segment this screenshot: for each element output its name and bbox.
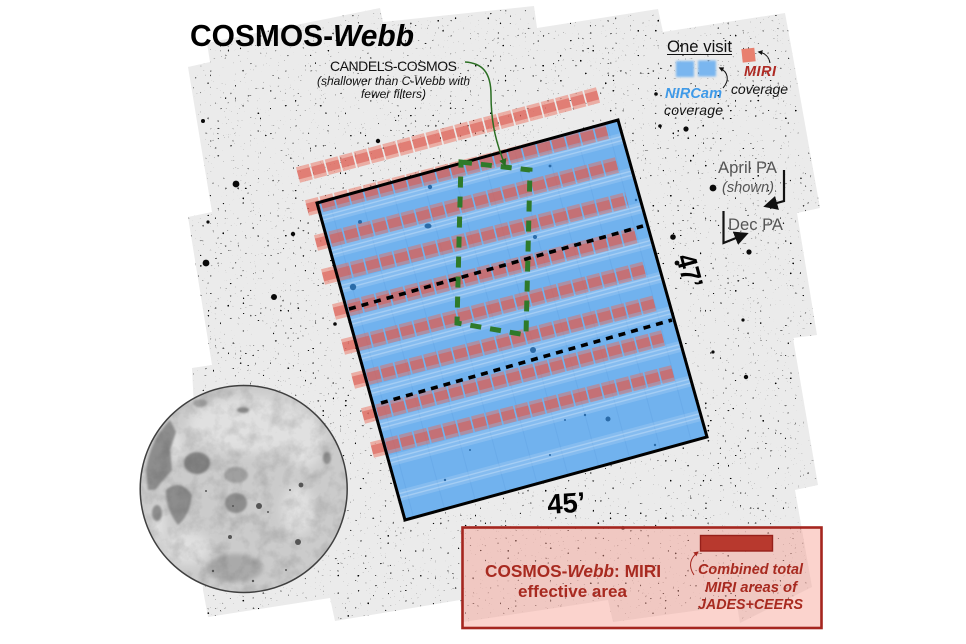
legend: one visit: One visit xyxy=(667,37,732,56)
sky mosaic background with star field xyxy=(180,0,830,630)
combined total note: Combined total xyxy=(698,561,804,578)
NIRCam label: NIRCam xyxy=(665,86,722,102)
legend: one visit xyxy=(664,37,788,118)
April PA label and arrow: (shown) xyxy=(722,179,774,196)
icon: MIRI footprint xyxy=(741,48,756,63)
icon: NIRCam footprint xyxy=(676,60,716,77)
black dashed line lower xyxy=(381,320,672,403)
arrow: MIRI xyxy=(759,52,770,63)
April PA label and arrow xyxy=(718,159,784,206)
moon image xyxy=(140,385,348,593)
black survey outline xyxy=(317,120,707,520)
dimension label 47': 47’ xyxy=(670,251,709,291)
April PA label and arrow: April PA xyxy=(718,159,777,177)
CANDELS-COSMOS label: (shallower than C-Webb with xyxy=(317,74,470,88)
JADES+CEERS area bar xyxy=(700,536,772,551)
combined total note: JADES+CEERS xyxy=(698,596,803,613)
Dec PA label and arrow: Dec PA xyxy=(728,216,783,234)
NIRCam coverage label: coverage xyxy=(664,102,723,118)
blue NIRCam coverage area xyxy=(319,122,706,518)
title: COSMOS-Webb xyxy=(190,18,414,53)
dimension label 45': 45’ xyxy=(546,486,586,520)
panel: MIRI area comparison xyxy=(462,528,822,628)
combined total note xyxy=(698,561,804,613)
MIRI coverage rows xyxy=(298,95,673,450)
effective area label: effective area xyxy=(518,582,628,601)
CANDELS-COSMOS green dashed footprint xyxy=(457,162,530,335)
CANDELS-COSMOS label xyxy=(317,58,470,101)
MIRI coverage label: coverage xyxy=(731,81,788,97)
black dashed line upper xyxy=(349,226,643,309)
combined total note: MIRI areas of xyxy=(705,579,799,596)
COSMOS-Webb MIRI label: COSMOS-Webb: MIRI xyxy=(485,561,661,581)
MIRI label: MIRI xyxy=(744,64,777,80)
CANDELS-COSMOS label: CANDELS-COSMOS xyxy=(330,58,457,74)
Dec PA label and arrow xyxy=(724,211,783,243)
arrow: CANDELS label to footprint xyxy=(465,62,505,165)
arrow: NIRCam xyxy=(720,68,727,88)
arrow: to area bar xyxy=(691,552,698,575)
CANDELS-COSMOS label: fewer filters) xyxy=(361,87,426,101)
